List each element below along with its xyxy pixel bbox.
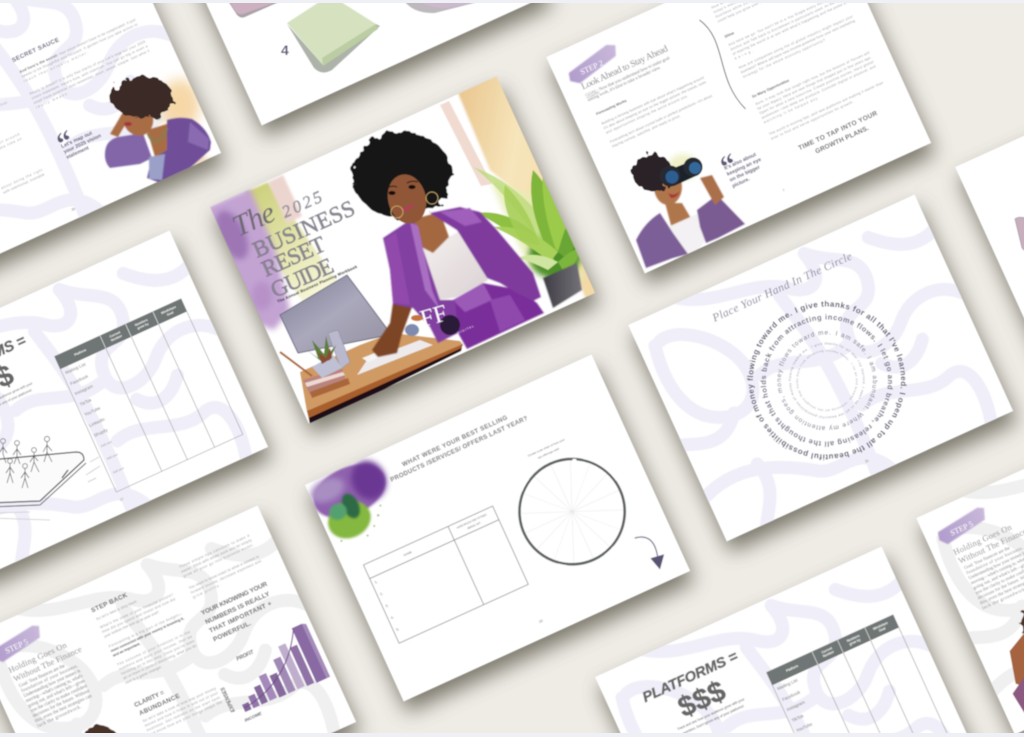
spiral affirmation text: I let go and breathe, releasing all the thoughts that holds back from attracting income flows. [796, 350, 858, 412]
text block: forecasting: Forecasting isn't about crystal balls or perfect predictions—it's about [609, 94, 713, 144]
page number: 15 [538, 619, 543, 624]
quote text: statement [65, 145, 90, 161]
panel: cover page [210, 76, 596, 424]
text block: third column: forward income, decrease expenses and [190, 559, 262, 595]
panel: far right page [955, 36, 1024, 384]
chart: income and profit bars: INCOME [244, 710, 263, 723]
text block: right column: Open for what a new tomorrow. Create positive stories. Hard global [759, 60, 874, 115]
text block: goal: lack the groundwork. [37, 705, 82, 729]
illustration: woman [983, 598, 1024, 730]
label: step 5 brush [934, 505, 991, 547]
text block: right column: Now are companies using the of global industry might impact your [738, 14, 854, 70]
panel: step 5 finances page left [0, 500, 362, 737]
table: name and money: 1. [374, 580, 378, 585]
callout: knowing your numbers: YOUR KNOWING YOUR [200, 581, 269, 617]
table: platform numbers: Current [109, 330, 122, 339]
text block: right column: Shine [724, 31, 735, 39]
text block: goal: Understanding how your money is [23, 669, 82, 699]
table: platform numbers: Platform [785, 664, 799, 673]
heading: platforms: PLATFORMS = [640, 648, 741, 706]
table: name and money [363, 506, 528, 643]
table: platform numbers: LinkedIn [88, 416, 106, 428]
text block: goal: foundation of your business. [21, 664, 79, 694]
coffee cup [405, 315, 423, 336]
page number: 7 [782, 188, 785, 193]
quote text [723, 151, 768, 190]
quote text: keeping an eye [726, 157, 762, 178]
table: platform numbers: Instagram [74, 383, 94, 396]
illustration: people on phone [0, 436, 100, 520]
text block: goal: setting work, it's time to take a broader view. [587, 66, 662, 103]
text block: forecasting [595, 66, 715, 149]
caption: pie chart: top offerings sold. [537, 446, 560, 460]
table: platform numbers: Shopify [93, 427, 109, 438]
table: platform numbers: TikTok [791, 713, 805, 723]
table: platform numbers: Mailing List [64, 361, 87, 375]
chart: income and profit bars [220, 623, 330, 722]
callout: time to tap: TIME TO TAP INTO YOUR [797, 110, 879, 152]
pot [543, 263, 582, 308]
afro hair [352, 132, 452, 218]
table: platform numbers: Goal [166, 310, 174, 317]
table: platform numbers [767, 615, 955, 737]
callout: knowing your numbers: THAT IMPORTANT + [208, 600, 273, 635]
text block: secret sauce copy: needs to be thoughtful and focused. It guides how you take action to [21, 22, 138, 79]
text block: goal: you the clarity to make confident [30, 684, 89, 714]
quote mark: “ [52, 124, 79, 160]
page number: 31 [864, 459, 870, 464]
text block: caption [0, 382, 32, 406]
text block: step back copy: So let's take a step back. [96, 599, 138, 621]
table: platform numbers: YouTube [83, 405, 102, 417]
curtain [440, 72, 602, 300]
logo: DIGITAL [457, 324, 475, 335]
text block: clarity copy: business. Get realistic on the start save [146, 695, 221, 732]
text block: goal: GOAL: Now that you understand how to make goal [585, 56, 671, 99]
heading: place your hand: Place Your Hand In The Circle [710, 251, 854, 325]
panel: best selling products page [305, 354, 690, 702]
heading: best selling: PRODUCTS /SERVICES/ OFFERS LAST YEAR? [389, 415, 529, 484]
table: platform numbers: Mailing List [776, 677, 799, 691]
table: platform numbers: Add your [112, 466, 125, 474]
left column text fragments: about doing the right [0, 168, 43, 190]
text block: third column: You need to know exact to what a needed in [188, 555, 260, 590]
text block: right column [708, 0, 887, 141]
text block: third column: easier. Stick with whats work and do simply [181, 538, 253, 574]
text block: right column: be your legacy. Here are new things that shaped just in few years ago. [757, 55, 872, 111]
table: platform numbers: Number [822, 649, 836, 658]
text block: third column [178, 534, 264, 599]
text block: forecasting: Building a thriving business with eye about what's happening around [601, 76, 705, 126]
table: platform numbers: Numbers [134, 318, 149, 327]
text block: clarity copy: So let's take a look at how way your money [142, 686, 217, 723]
chart: empty pie [501, 441, 643, 582]
text block: caption: numbers. Don't ignore any of your platforms! [682, 704, 745, 735]
monitor [280, 275, 388, 369]
heading: clarity abundance: CLARITY = [133, 689, 166, 709]
text block: secret sauce copy: Ready to dream? It is only that clarity of your Let's map out your 2025 [29, 40, 146, 96]
panel: top centre page with notebook [206, 3, 532, 126]
illustration: woman with binoculars [632, 153, 745, 268]
label: step 5 brush [0, 625, 40, 663]
table: platform numbers: Facebook [781, 689, 802, 702]
page number: 17 [119, 497, 125, 502]
spiral affirmation text: I give thanks for all that I've learned. I open up to all the beautiful possibilities of money flowing toward me. [746, 300, 908, 461]
spiral affirmation text: I give thanks for all that I've learned. I open up to all the beautiful possibilities of money flowing toward me. [788, 342, 866, 419]
text block: third column: grow all your go into business model. [183, 543, 254, 578]
text block: goal: moving—what's coming in, what's [25, 674, 84, 704]
divider curve [699, 18, 746, 111]
text block: step back copy: What's the state of your financial picture? [99, 593, 174, 630]
watercolor wash: purple and green [206, 175, 340, 330]
title: BUSINESS [249, 195, 359, 263]
label: step 5 brush: STEP 5 [4, 637, 30, 656]
heading: secret sauce: SECRET SAUCE [11, 37, 60, 64]
dollar signs: $$$ [673, 675, 731, 724]
text block: third column: grow profits. [192, 583, 221, 599]
spiral affirmation text: I let go and breathe, releasing all the thoughts that holds back from attracting income flows. [760, 314, 894, 448]
table: platform numbers: Mindshare [160, 305, 177, 315]
text block: goal: foundation of your business. [966, 546, 1024, 576]
table: platform numbers: Add your [106, 452, 119, 461]
illustration: woman [84, 723, 118, 733]
text block: forecasting: and opportunities shaping the world around you. [605, 94, 689, 135]
table: platform numbers: grew by [137, 322, 149, 330]
table: platform numbers: Current [821, 646, 834, 655]
panel: platforms page lower right [590, 541, 986, 737]
text block: right column: of sharing the world is at war with what's happening and the pulse of [732, 1, 847, 56]
chart: income and profit bars: EXPENSES [220, 685, 237, 713]
panel: secret sauce page [0, 3, 222, 254]
title: The Annual Business Planning Workbook [276, 264, 359, 304]
text block: goal: Goal: Your finances are the [963, 546, 1011, 571]
title: 2025 [279, 187, 325, 222]
icon: pink shape [228, 3, 278, 18]
illustration: woman in purple suit [352, 132, 544, 357]
heading: holding goes on: Holding Goes On [952, 521, 1014, 557]
label: step 2 brush: STEP 2 [579, 58, 605, 77]
caption: pie chart: Create a pie chart of how your [527, 437, 565, 458]
text block: caption: Track and see how your audience grow with your [677, 697, 746, 731]
table: platform numbers: Number [110, 333, 124, 342]
text block: secret sauce copy: small fresh potential. And remember, short, sweet, simple. Just what it [33, 49, 150, 105]
quote text: picture. [731, 176, 751, 190]
heading: clarity abundance: ABUNDANCE [138, 692, 182, 717]
text block: step back copy [96, 593, 196, 684]
table: name and money: 2. [379, 592, 384, 596]
text block: step back copy: focusing on in this step. Once you've seen [121, 639, 195, 676]
title: RESET [258, 231, 329, 282]
text block: forecasting: Forecasting Works [595, 99, 627, 116]
callout: knowing your numbers: NUMBERS IS REALLY [204, 591, 271, 626]
text block: step back copy: next is a game changer. [125, 665, 163, 685]
table: name and money: 3. [385, 603, 389, 608]
heading: look ahead: Look Ahead to Stay Ahead [580, 44, 670, 92]
callout: knowing your numbers: POWERFUL. [212, 620, 253, 643]
table: platform numbers [55, 299, 243, 492]
table: platform numbers: grew by [849, 638, 861, 646]
text block: secret sauce copy: really means. [35, 91, 70, 110]
left column text fragments: with intentional, trustable [2, 172, 45, 195]
text block: step back copy: The outcome of your finances is in the [116, 630, 191, 667]
table: name and money: 5. [396, 627, 400, 632]
text block: forecasting: it's also about keeping an eye on the bigger picture: the trends, tools [603, 80, 707, 130]
step number 4: 4 [281, 42, 289, 58]
text block: forecasting: staying curious, watchful, and ready to pivot. [611, 114, 681, 148]
text block: right column: So Many Opportunities [751, 79, 790, 99]
body [372, 207, 544, 357]
text block: step back copy: numbers and even your income, that we [118, 635, 193, 671]
text block: third column: These simple tips calculate to make it [178, 534, 250, 569]
page number: 26 [71, 207, 76, 212]
icon: lilac shape [406, 3, 476, 14]
callout: knowing your numbers [200, 581, 272, 642]
quote text: Let's map out [60, 130, 94, 150]
label: step 2 brush [563, 42, 624, 87]
heading: holding goes on: Without The Finance [12, 644, 83, 684]
panel: step 5 finances page right [911, 382, 1024, 737]
table: name and money: 4. [390, 615, 395, 620]
text block: clarity copy: moves and how it flows in and out of your [144, 691, 219, 728]
panel: place your hand in the circle page [628, 194, 1014, 542]
text block: clarity copy: and know how are your things shape the [148, 700, 223, 737]
illustration: woman with curly hair [105, 76, 216, 184]
text block: right column: The world is moving fast, and new platforms are making it easier than [768, 81, 884, 136]
watercolor splash [305, 453, 405, 551]
text block: secret sauce copy: vision statement. Here's how, with intention. You can go big or even a [31, 44, 148, 100]
table: platform numbers: Instagram [786, 699, 806, 712]
table: name and money: HOW MUCH DID IT/THEY [456, 512, 488, 530]
quote text: your 2025 vision [63, 133, 102, 155]
title [227, 187, 359, 304]
table: platform numbers: YouTube [795, 721, 814, 733]
panel: step 2 look ahead page [538, 0, 946, 311]
books and small plant [303, 336, 350, 398]
text block: right column: audiences—real deep our products. Consider digital or physical, and [761, 64, 876, 120]
title: GUIDE [267, 253, 337, 303]
table: name and money: BRING IN? [467, 521, 482, 530]
panel: platforms page left [0, 225, 274, 586]
text block: step back copy: all of them in perfect discerning, what you do [123, 644, 197, 680]
heading: best selling: WHAT WERE YOUR BEST SELLING [401, 414, 509, 468]
text block: secret sauce copy [19, 18, 152, 110]
logo [417, 300, 475, 335]
quote mark: “ [715, 147, 743, 184]
text block: step back copy: How did you spend and invest and how did [101, 597, 176, 634]
table: platform numbers: TikTok [79, 397, 93, 407]
text block: goal: this, even the best strategies can [34, 694, 94, 724]
callout: time to tap: GROWTH PLANS. [814, 125, 870, 155]
quote text: It's also about [723, 152, 758, 172]
table: name and money: NAME [403, 550, 412, 557]
icon: green notebook [287, 0, 380, 73]
text block: goal: decisions for the future. Without [32, 689, 91, 719]
text block: goal [18, 664, 92, 728]
table: platform numbers: Goal [878, 626, 886, 633]
title: The [227, 196, 280, 243]
table: platform numbers: Facebook [69, 373, 90, 386]
text block: right column: Sure, it may look that tough right now, but the lessons of Thriven will [755, 51, 870, 106]
table: platform numbers: Add your [100, 439, 113, 448]
desk [280, 333, 463, 426]
spiral affirmation text: I am safe. I am abundant. Where my attention goes, money flows toward me. [776, 330, 878, 430]
text block: right column: strategy for the whole economy opportunity? [742, 38, 826, 79]
text block: goal [963, 541, 1024, 611]
face [383, 170, 438, 228]
plant [473, 167, 581, 279]
icon: pink shape [1015, 217, 1024, 252]
text block: right column: being. [734, 49, 754, 61]
text block: step back copy: more connected with your money is knowing it, [110, 616, 185, 653]
arrow [635, 530, 669, 574]
heading: holding goes on: Holding Goes On [7, 639, 69, 675]
table: platform numbers: Numbers [846, 634, 861, 643]
text block: secret sauce copy: And here's the secret: Your vision doesn't have to be complicated. It just [19, 18, 136, 74]
text block: right column: business? Where will have new income-potential from your next marketing [740, 19, 856, 74]
text block: right column: watching it be helped any. [763, 96, 819, 124]
text block: step back copy: your bottom line end up at year end? [103, 610, 160, 639]
label: step 5 brush: STEP 5 [949, 519, 975, 538]
text block: right column: ever to find and serve opportunities for growth. [770, 100, 854, 141]
heading: step back: STEP BACK [90, 592, 129, 614]
quote text: on the bigger [729, 165, 761, 184]
table: platform numbers: Platform [73, 348, 87, 357]
table: platform numbers: Mindshare [872, 621, 889, 631]
text block: step back copy: Forecasting is a big part of the budget— [108, 612, 183, 649]
left column text fragments [0, 99, 45, 195]
text block: step back copy: and an important. [112, 642, 141, 658]
text block: goal: going out, and what's left—gives [28, 679, 86, 709]
chart: income and profit bars: PROFIT [236, 649, 256, 663]
text block: secret sauce copy: reach that actually matter. [23, 51, 88, 83]
text block: goal: Goal: Your finances are the [18, 664, 66, 689]
logo: FF [417, 300, 450, 333]
